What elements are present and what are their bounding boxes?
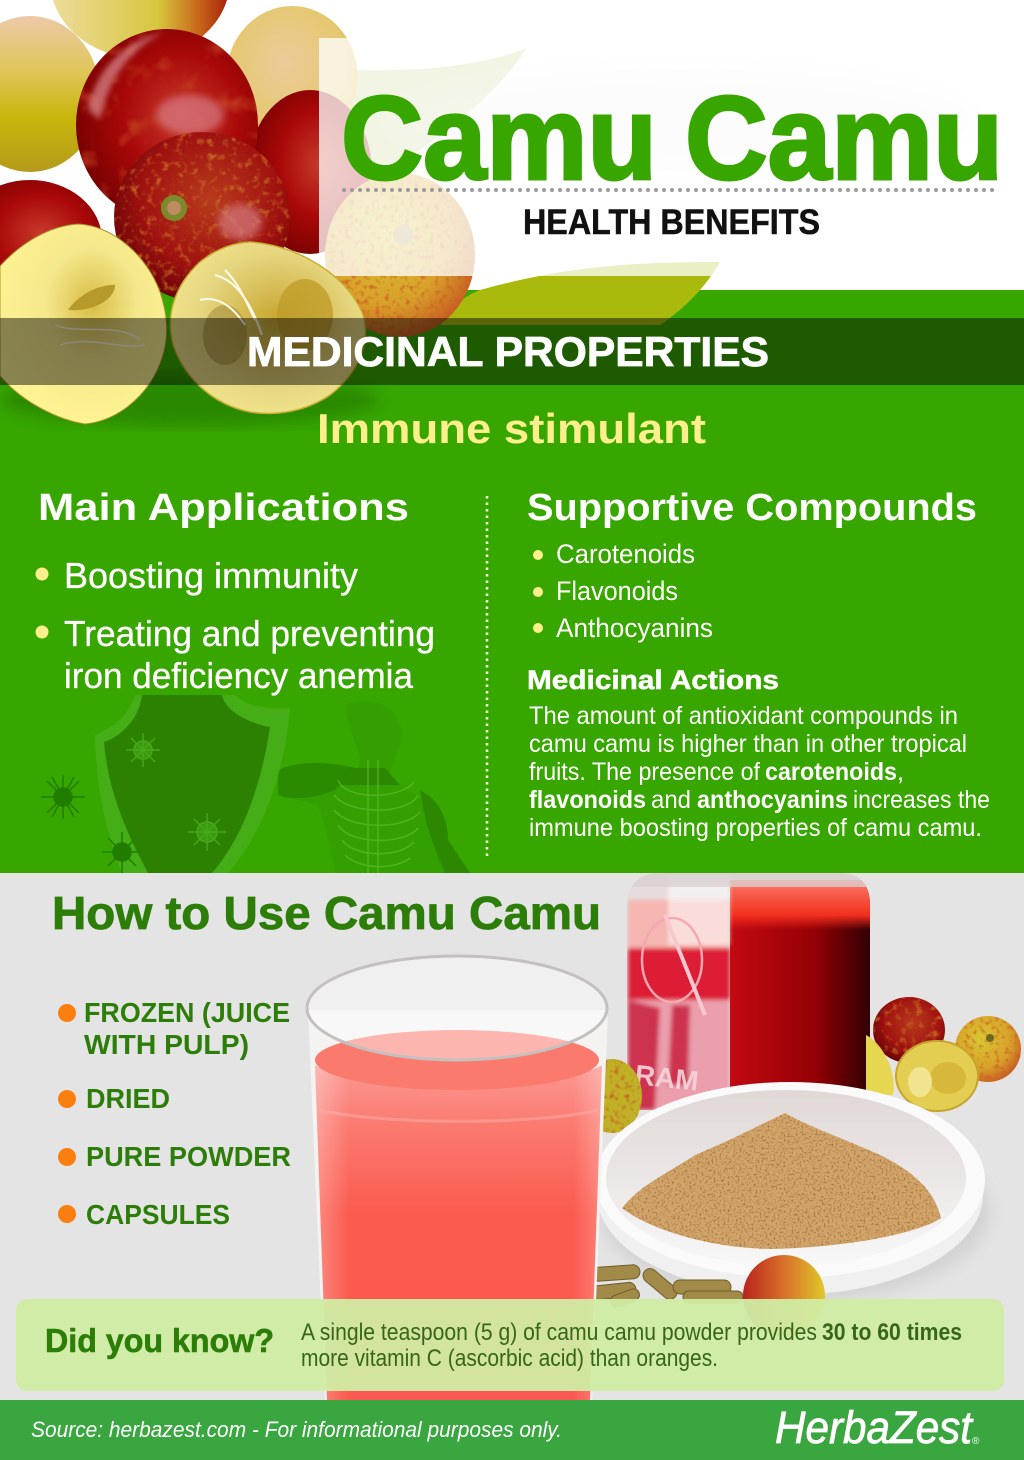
list: forms of use: DRIED (86, 1083, 170, 1114)
fruit pile (0, 0, 475, 337)
small fruits beside jar (866, 997, 1021, 1111)
text: medicinal actions: anthocyanins (697, 786, 848, 814)
capsules (591, 1264, 743, 1309)
callout: did you know: A single teaspoon (5 g) of camu camu powder provides (301, 1319, 817, 1346)
text: medicinal actions: and (651, 786, 691, 814)
text: medicinal actions: camu camu is higher than in other tropical (529, 730, 967, 758)
jar of red juice: RAM (633, 1059, 700, 1097)
callout: did you know: 30 to 60 times (822, 1319, 962, 1346)
list: forms of use: FROZEN (JUICE (84, 997, 290, 1028)
panel: translucent title backdrop (319, 38, 1024, 276)
decorative leaf upper (340, 48, 527, 165)
logo: HerbaZest: ® (972, 1436, 980, 1447)
list: forms of use: PURE POWDER (86, 1141, 291, 1172)
list: forms of use: CAPSULES (86, 1199, 230, 1230)
heading: main applications: Main Applications (38, 487, 409, 529)
text: medicinal actions (529, 702, 990, 842)
list: compounds: Carotenoids (556, 539, 695, 569)
text: medicinal actions: flavonoids (529, 786, 646, 814)
heading: supportive compounds: Supportive Compounds (527, 487, 977, 529)
heading: medicinal actions: Medicinal Actions (527, 665, 779, 695)
text: medicinal actions: immune boosting properties of camu camu. (529, 814, 982, 842)
title: Camu (341, 72, 657, 205)
illustration: shield and body (41, 695, 470, 873)
callout: did you know: Did you know? (45, 1322, 274, 1359)
list: forms of use: WITH PULP) (84, 1029, 249, 1060)
text: medicinal actions: fruits. The presence of (529, 758, 760, 786)
list: compounds: Anthocyanins (556, 613, 713, 643)
list: compounds: Flavonoids (556, 576, 678, 606)
heading: medicinal properties: MEDICINAL PROPERTIES (247, 328, 769, 375)
text: medicinal actions: increases the (853, 786, 990, 814)
dotted rule under title (344, 188, 998, 192)
source note: Source: herbazest.com - For informational purposes only. (31, 1417, 562, 1442)
logo: HerbaZest: HerbaZest (775, 1402, 974, 1453)
heading: how to use: How to Use Camu Camu (52, 887, 601, 939)
text: medicinal actions: The amount of antioxidant compounds in (529, 702, 958, 730)
list: main applications: iron deficiency anemia (64, 655, 414, 696)
fruit shadow on green (0, 374, 380, 426)
fruit in front of bowl (743, 1255, 825, 1337)
white strip right of header (730, 276, 1024, 290)
text: medicinal actions: , (897, 758, 904, 786)
dotted column divider (486, 496, 488, 860)
list: forms of use (58, 997, 291, 1230)
band: medicinal properties (0, 318, 1024, 385)
bowl of powder (595, 1082, 990, 1302)
subtitle: HEALTH BENEFITS (523, 203, 820, 242)
glass of juice (307, 956, 608, 1400)
list: compounds (533, 539, 713, 643)
fruit behind glass (582, 1059, 642, 1133)
footer bar (0, 1400, 1024, 1460)
list: main applications (36, 555, 435, 696)
panel: how to use (0, 873, 1024, 1400)
panel: green medicinal section (0, 290, 1024, 873)
body silhouette (278, 701, 470, 873)
callout: did you know: more vitamin C (ascorbic acid) than oranges. (301, 1345, 718, 1372)
title: Camu (685, 72, 1003, 205)
cut fruit left (0, 224, 167, 424)
subheading: immune stimulant: Immune stimulant (317, 405, 706, 452)
faint shadow behind title (380, 65, 980, 175)
virus icons (41, 775, 85, 819)
list: main applications: Boosting immunity (64, 555, 358, 596)
list: main applications: Treating and preventing (64, 613, 435, 654)
text: medicinal actions: carotenoids (765, 758, 897, 786)
decorative leaf lower (440, 262, 720, 325)
shield (95, 695, 290, 873)
callout: did you know (16, 1299, 1004, 1391)
cut fruit right (170, 242, 365, 413)
jar of red juice (627, 873, 870, 1113)
